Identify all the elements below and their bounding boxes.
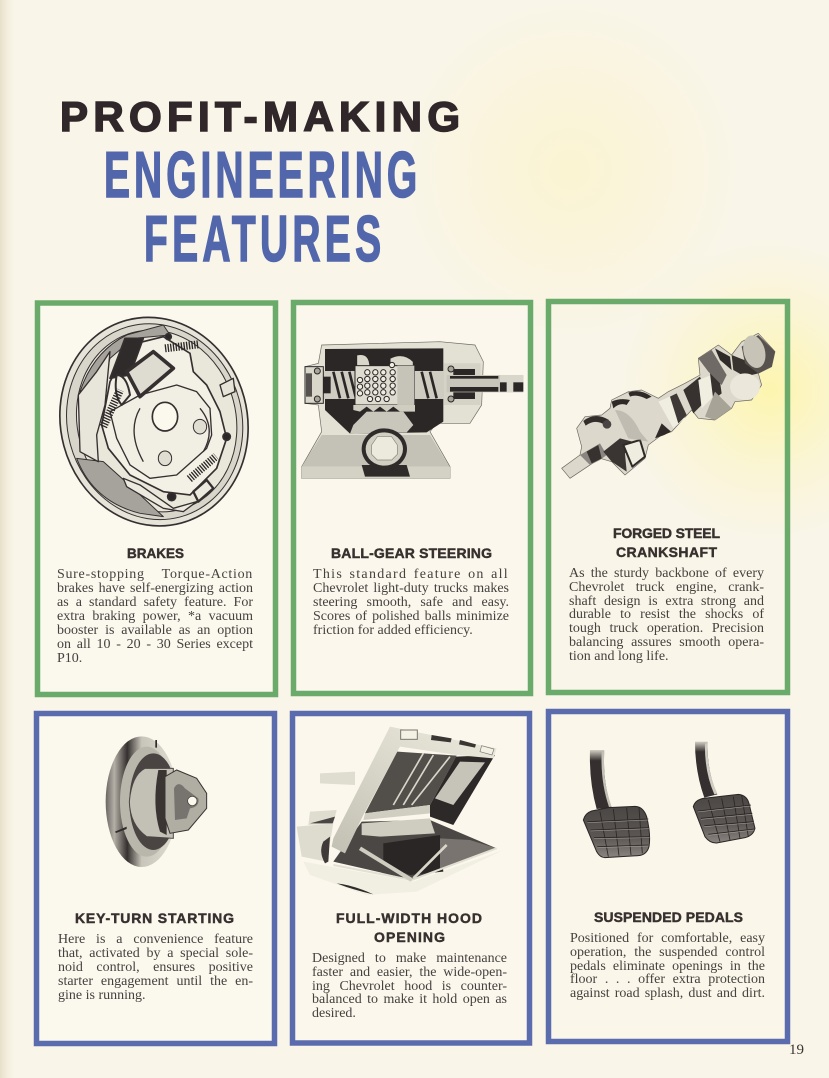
text block: ing Chevrolet hood is counter-	[312, 979, 507, 994]
title: ENGINEERING	[104, 139, 421, 212]
text block	[312, 952, 507, 1024]
title: FEATURES	[144, 203, 385, 276]
panel: full-width hood opening	[292, 714, 530, 1043]
panel: forged steel crankshaft	[548, 302, 788, 692]
icon: crankshaft	[562, 333, 775, 478]
text block: friction for added efficiency.	[313, 623, 473, 638]
text block: shaft design is extra strong and	[569, 594, 764, 609]
title: PROFIT-MAKING	[60, 93, 460, 140]
text block	[57, 568, 253, 668]
icon: pedals	[583, 742, 755, 858]
text block: that, activated by a special sole-	[58, 946, 253, 961]
text block: faster and easier, the wide-open-	[312, 965, 507, 980]
panel: key-turn starting	[36, 714, 274, 1044]
heading: CRANKSHAFT	[616, 544, 717, 560]
icon: ignition key	[106, 736, 207, 867]
icon: brake assembly	[37, 296, 271, 547]
text block: against road splash, dust and dirt.	[570, 986, 765, 1001]
heading	[613, 525, 720, 560]
text block: floor . . . offer extra protection	[570, 972, 765, 987]
panel: suspended pedals	[548, 712, 788, 1042]
heading: SUSPENDED PEDALS	[594, 909, 743, 925]
text block: balancing assures smooth opera-	[569, 635, 764, 650]
panel: brakes	[37, 296, 276, 694]
heading: BALL-GEAR STEERING	[331, 545, 492, 561]
text block: steering smooth, safe and easy.	[313, 595, 509, 610]
text block: starter engagement until the en-	[58, 974, 253, 989]
text block: Scores of polished balls minimize	[313, 609, 509, 624]
text block	[569, 567, 764, 665]
icon: open hood	[297, 727, 503, 895]
text block: durable to resist the shocks of	[569, 607, 764, 622]
text block: desired.	[312, 1006, 356, 1021]
text block: balanced to make it hold open as	[312, 992, 507, 1007]
text block: This standard feature on all	[313, 567, 509, 582]
heading: KEY-TURN STARTING	[75, 910, 234, 926]
text block: operation, the suspended control	[570, 945, 765, 960]
title	[60, 93, 460, 276]
text block: gine is running.	[58, 988, 146, 1003]
text block: noid control, ensures positive	[58, 960, 253, 975]
text block: tion and long life.	[569, 649, 669, 664]
text block: booster is available as an option	[57, 623, 253, 638]
panel: ball-gear steering	[294, 302, 530, 694]
text block: Here is a convenience feature	[58, 932, 253, 947]
page number: 19	[789, 1042, 804, 1058]
text block: tough truck operation. Precision	[569, 621, 764, 636]
text block: extra braking power, *a vacuum	[57, 609, 253, 624]
heading: BRAKES	[127, 545, 184, 561]
heading: OPENING	[374, 929, 445, 945]
heading: FORGED STEEL	[613, 525, 720, 541]
text block: P10.	[57, 651, 82, 666]
text block: pedals eliminate openings in the	[570, 959, 765, 974]
text block: Designed to make maintenance	[312, 951, 507, 966]
text block: as a standard safety feature. For	[57, 595, 253, 610]
text block: Chevrolet light-duty trucks makes	[313, 581, 509, 596]
text block: Chevrolet truck engine, crank-	[569, 580, 764, 595]
text block: brakes have self-energizing action	[57, 581, 253, 596]
text block: on all 10 - 20 - 30 Series except	[57, 637, 253, 652]
heading: FULL-WIDTH HOOD	[336, 910, 482, 926]
text block: Sure-stopping Torque-Action	[57, 567, 253, 582]
text block: Positioned for comfortable, easy	[570, 931, 765, 946]
text block	[570, 932, 765, 1004]
icon: steering gear	[302, 342, 523, 478]
text block: As the sturdy backbone of every	[569, 566, 764, 581]
text block	[313, 568, 509, 640]
heading	[336, 910, 482, 945]
text block	[58, 933, 253, 1005]
